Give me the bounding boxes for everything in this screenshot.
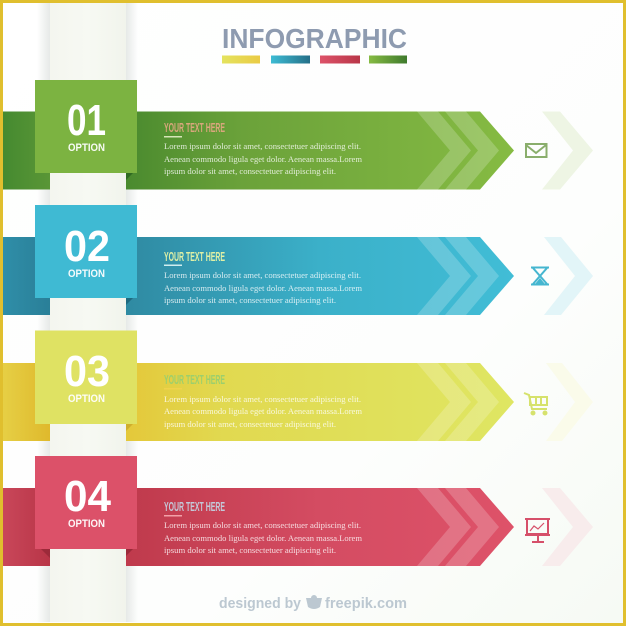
option label: OPTION	[68, 268, 105, 280]
heading: YOUR TEXT HERE	[164, 373, 225, 387]
left bar stub	[3, 488, 50, 566]
icon: freepik crown	[306, 595, 322, 609]
number tile	[35, 330, 137, 424]
panel: option 01	[3, 80, 593, 190]
heading: YOUR TEXT HERE	[164, 250, 225, 264]
footer credit: freepik.com	[325, 596, 407, 612]
body text: Lorem ipsum dolor sit amet, consectetuer adipiscing elit.	[164, 520, 361, 530]
title colour swatches	[222, 56, 407, 64]
body text: Aenean commodo ligula eget dolor. Aenean massa.Lorem	[164, 406, 362, 416]
double chevron	[417, 363, 499, 441]
arrow bar	[126, 363, 514, 441]
ribbon fold shadow	[126, 424, 133, 431]
option label: OPTION	[68, 393, 105, 405]
number: 01	[67, 96, 106, 145]
double chevron	[417, 488, 499, 566]
heading: YOUR TEXT HERE	[164, 121, 225, 135]
ribbon fold shadow	[126, 173, 133, 180]
icon: hourglass	[531, 268, 549, 284]
ghost chevron	[542, 112, 593, 190]
icon: shopping cart	[524, 393, 547, 414]
double chevron	[417, 237, 499, 315]
body text	[164, 394, 362, 429]
double chevron	[417, 112, 499, 190]
heading underline	[164, 388, 182, 390]
body text	[164, 520, 362, 555]
title: INFOGRAPHIC	[222, 23, 407, 54]
number: 02	[64, 222, 110, 271]
heading: YOUR TEXT HERE	[164, 500, 225, 514]
icon: envelope	[526, 144, 546, 157]
left bar stub	[3, 363, 50, 441]
body text: ipsum dolor sit amet, consectetuer adipiscing elit.	[164, 419, 336, 429]
body text: Aenean commodo ligula eget dolor. Aenean massa.Lorem	[164, 533, 362, 543]
left bar stub	[3, 112, 50, 190]
body text: Lorem ipsum dolor sit amet, consectetuer adipiscing elit.	[164, 270, 361, 280]
body text: ipsum dolor sit amet, consectetuer adipiscing elit.	[164, 166, 336, 176]
footer credit	[219, 595, 407, 612]
body text: ipsum dolor sit amet, consectetuer adipiscing elit.	[164, 545, 336, 555]
heading underline	[164, 136, 182, 138]
number: 03	[64, 347, 110, 396]
heading underline	[164, 515, 182, 516]
panel: option 04	[3, 456, 593, 566]
body text	[164, 141, 362, 176]
left bar stub	[3, 237, 50, 315]
icon: presentation board	[525, 519, 550, 542]
panel: option 03	[3, 330, 593, 441]
ghost chevron	[546, 363, 593, 441]
ribbon fold shadow	[126, 549, 133, 556]
heading underline	[164, 264, 182, 266]
arrow bar	[126, 237, 514, 315]
body text: Lorem ipsum dolor sit amet, consectetuer adipiscing elit.	[164, 394, 361, 404]
arrow bar	[126, 488, 514, 566]
number tile	[35, 456, 137, 549]
ghost chevron	[544, 237, 593, 315]
number: 04	[64, 472, 111, 521]
option label: OPTION	[68, 518, 105, 530]
body text: Aenean commodo ligula eget dolor. Aenean massa.Lorem	[164, 154, 362, 164]
footer credit: designed by	[219, 596, 301, 612]
body text: ipsum dolor sit amet, consectetuer adipiscing elit.	[164, 295, 336, 305]
ribbon fold shadow	[126, 298, 133, 305]
number tile	[35, 205, 137, 298]
ghost chevron	[542, 488, 593, 566]
body text	[164, 270, 362, 305]
body text: Aenean commodo ligula eget dolor. Aenean massa.Lorem	[164, 283, 362, 293]
option label: OPTION	[68, 142, 105, 154]
body text: Lorem ipsum dolor sit amet, consectetuer adipiscing elit.	[164, 141, 361, 151]
number tile	[35, 80, 137, 173]
vertical backing strip	[37, 3, 138, 622]
panel: option 02	[3, 205, 593, 315]
arrow bar	[126, 112, 514, 190]
